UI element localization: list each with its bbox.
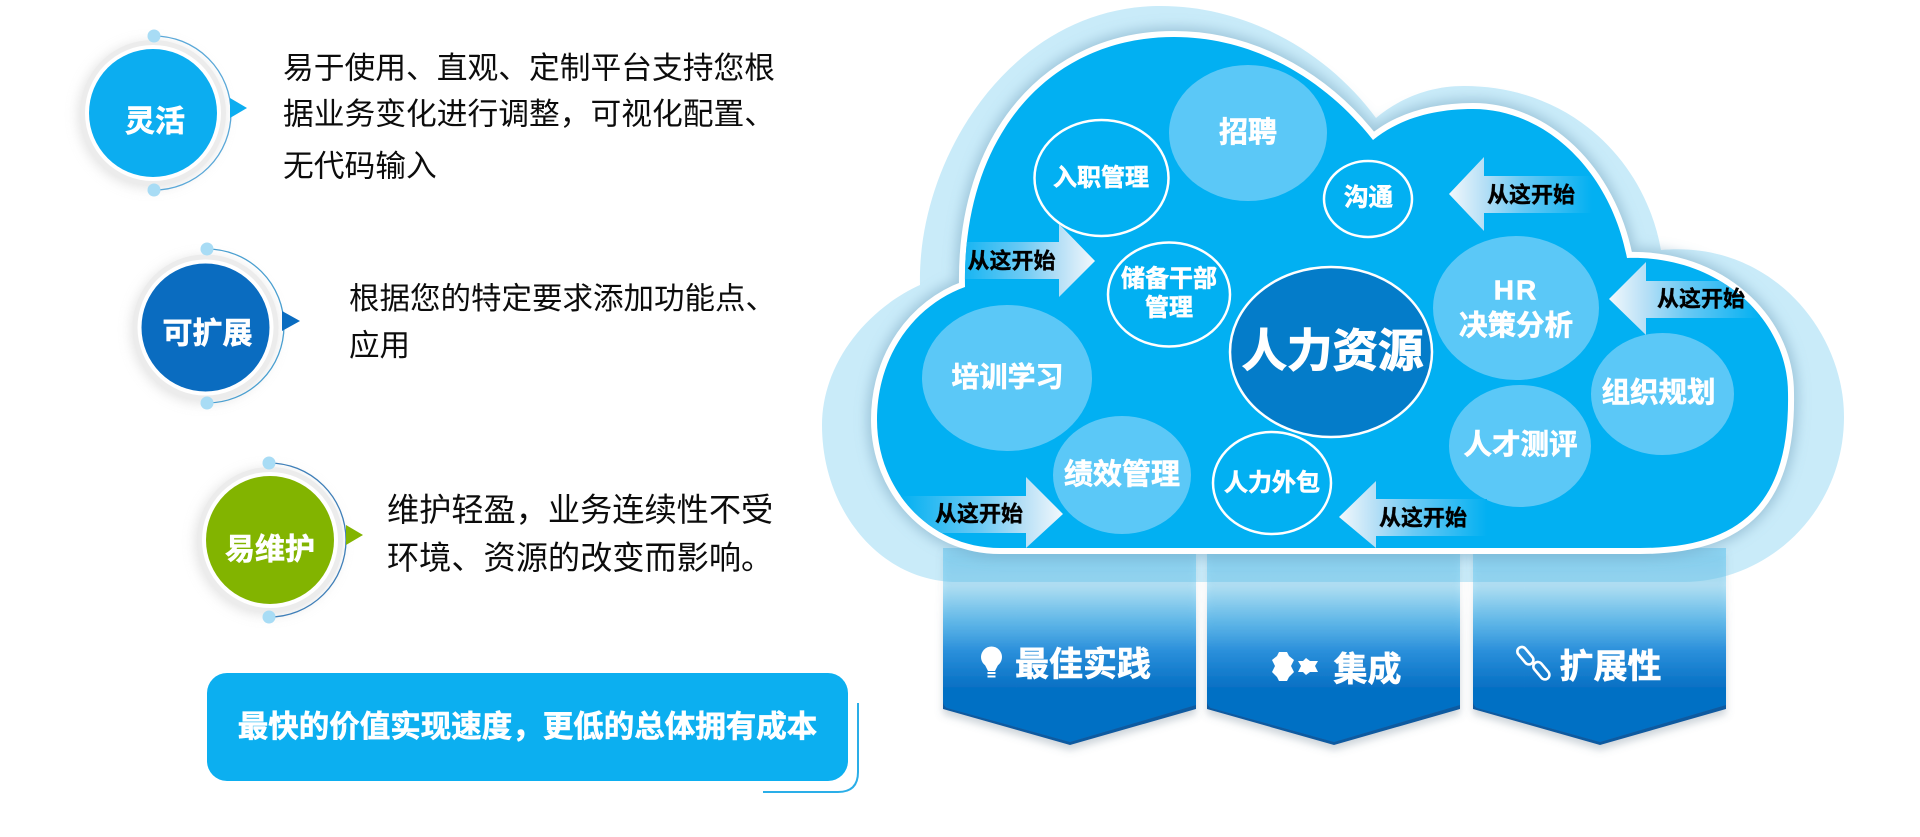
bubble: HR决策分析 bbox=[1433, 236, 1599, 380]
tab: 最佳实践 bbox=[943, 548, 1196, 745]
description: 灵活: 据业务变化进行调整，可视化配置、 bbox=[283, 96, 775, 132]
bubble: 人力资源: 人力资源 bbox=[1241, 326, 1424, 376]
tab: 扩展性 bbox=[1473, 548, 1726, 745]
bubble: 储备干部管理: 管理 bbox=[1145, 294, 1193, 322]
badge: 易维护 bbox=[195, 456, 363, 624]
cloud: inner shadow bbox=[877, 37, 1788, 548]
arrow: 从这开始 upper left bbox=[950, 224, 1095, 297]
bubble: 招聘 bbox=[1169, 65, 1327, 201]
bubble: 储备干部管理: 储备干部 bbox=[1121, 266, 1217, 292]
arrow: 从这开始 bottom bbox=[1339, 481, 1487, 548]
callout: value banner bbox=[207, 673, 858, 792]
arrow: 从这开始 far right bbox=[1609, 262, 1760, 335]
description: 易维护: 维护轻盈，业务连续性不受 bbox=[387, 492, 773, 528]
arrow: 从这开始 lower left: 从这开始 bbox=[935, 502, 1023, 526]
arrow: 从这开始 lower left bbox=[900, 477, 1063, 548]
feature: 易维护 bbox=[195, 456, 773, 624]
bubble: 人才测评: 人才测评 bbox=[1463, 429, 1578, 461]
bubble: 人力外包: 人力外包 bbox=[1224, 470, 1320, 496]
badge: 可扩展: 可扩展 bbox=[162, 318, 252, 350]
bubble: 绩效管理 bbox=[1053, 416, 1191, 534]
feature: 灵活 bbox=[78, 30, 775, 196]
bubble: 人才测评 bbox=[1449, 385, 1591, 507]
description: 灵活: 无代码输入 bbox=[283, 148, 437, 184]
icon: chain link bbox=[1516, 645, 1551, 681]
bubble: 沟通 bbox=[1324, 161, 1412, 237]
bubble: 储备干部管理 bbox=[1108, 242, 1230, 346]
bubble: 人力外包 bbox=[1213, 432, 1331, 534]
bubble: 招聘: 招聘 bbox=[1219, 116, 1277, 149]
description: 灵活 bbox=[283, 50, 775, 184]
icon: puzzle pieces bbox=[1272, 652, 1318, 681]
cloud: outer halo bbox=[822, 6, 1844, 582]
arrow: 从这开始 bottom: 从这开始 bbox=[1379, 506, 1467, 530]
description: 易维护: 环境、资源的改变而影响。 bbox=[387, 540, 773, 576]
bubble: 人力资源 bbox=[1230, 267, 1432, 437]
description: 灵活: 易于使用、直观、定制平台支持您根 bbox=[283, 50, 775, 86]
bubble: 组织规划 bbox=[1591, 333, 1734, 455]
badge: 灵活: 灵活 bbox=[125, 106, 185, 138]
bubble: 培训学习: 培训学习 bbox=[951, 362, 1064, 392]
badge: 灵活 bbox=[78, 30, 247, 196]
cloud: main body bbox=[877, 37, 1788, 548]
feature: 可扩展 bbox=[131, 242, 776, 410]
bubble: 绩效管理: 绩效管理 bbox=[1064, 458, 1180, 491]
bubble: 沟通: 沟通 bbox=[1344, 184, 1393, 212]
description: 可扩展: 根据您的特定要求添加功能点、 bbox=[349, 282, 776, 316]
arrow: 从这开始 upper right: 从这开始 bbox=[1487, 182, 1575, 208]
icon: light bulb bbox=[981, 646, 1002, 678]
arrow: 从这开始 far right: 从这开始 bbox=[1657, 286, 1745, 312]
bubble: 入职管理: 入职管理 bbox=[1053, 164, 1149, 192]
description: 易维护 bbox=[387, 492, 773, 576]
description: 可扩展: 应用 bbox=[349, 329, 410, 363]
description: 可扩展 bbox=[349, 282, 776, 363]
callout: value banner: 最快的价值实现速度，更低的总体拥有成本 bbox=[238, 710, 817, 744]
bubble: 组织规划: 组织规划 bbox=[1601, 377, 1716, 409]
tab: 集成: 集成 bbox=[1334, 651, 1402, 689]
badge: 可扩展 bbox=[131, 242, 300, 410]
bubble: 培训学习 bbox=[922, 305, 1092, 451]
bubble: HR决策分析: 决策分析 bbox=[1459, 310, 1573, 342]
badge: 易维护: 易维护 bbox=[225, 534, 315, 566]
arrow: 从这开始 upper left: 从这开始 bbox=[967, 248, 1056, 274]
tab: 集成 bbox=[1207, 548, 1460, 745]
arrow: 从这开始 upper right bbox=[1449, 157, 1592, 231]
tab: 扩展性: 扩展性 bbox=[1560, 648, 1662, 686]
bubble: HR决策分析: HR bbox=[1494, 274, 1538, 306]
tab: 最佳实践: 最佳实践 bbox=[1015, 646, 1151, 684]
bubble: 入职管理 bbox=[1034, 120, 1168, 236]
